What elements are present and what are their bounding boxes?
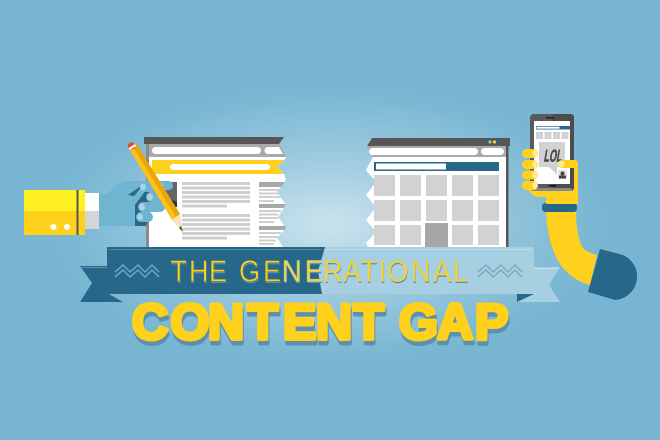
shirt cuff [85, 193, 99, 229]
heading: Content Gap: CONTENT GAP [133, 298, 509, 354]
phone [530, 114, 574, 191]
right ribbon tail [517, 267, 560, 302]
wristband [542, 203, 577, 212]
sleeve cuff [24, 190, 85, 235]
content grid [374, 175, 499, 247]
heading: The Generational [171, 260, 468, 284]
window dots [488, 140, 501, 144]
address bar [152, 147, 283, 154]
browser page [147, 144, 286, 247]
screen [534, 121, 570, 184]
yellow arm [546, 212, 597, 285]
avatar [558, 170, 567, 179]
panel: right grid browser [366, 138, 510, 247]
yellow headline banner [152, 160, 284, 174]
article text lines [182, 182, 250, 240]
left ribbon tail [80, 266, 123, 302]
ribbon light half [318, 247, 534, 294]
thumb [558, 160, 578, 168]
browser page [366, 146, 506, 247]
panel: left article browser [144, 137, 286, 248]
zigzag ornaments [115, 265, 522, 277]
ribbon dark half [107, 247, 325, 294]
hand [99, 181, 177, 226]
pencil [128, 142, 183, 232]
banner ribbon [80, 247, 560, 302]
blue search bar [374, 162, 499, 171]
heading: Content Gap: CONTENT GAP [132, 294, 508, 350]
sleeve [588, 249, 637, 300]
illustration: left hand with pencil [24, 142, 183, 235]
address bar [369, 148, 504, 155]
sidebar [259, 182, 286, 245]
palm [527, 160, 578, 204]
fingers [522, 149, 538, 190]
illustration: right arm holding phone [522, 114, 637, 300]
browser title bar [367, 138, 510, 146]
LOL speech bubble: LOL [543, 146, 564, 165]
heading: The Generational: THE GENERATIONAL [170, 255, 468, 289]
photo placeholder [157, 182, 177, 207]
browser title bar [144, 137, 284, 144]
heading: The Generational: THE GENERATIONAL [170, 255, 468, 289]
heading: The Generational: THE GENERATIONAL [171, 256, 469, 290]
